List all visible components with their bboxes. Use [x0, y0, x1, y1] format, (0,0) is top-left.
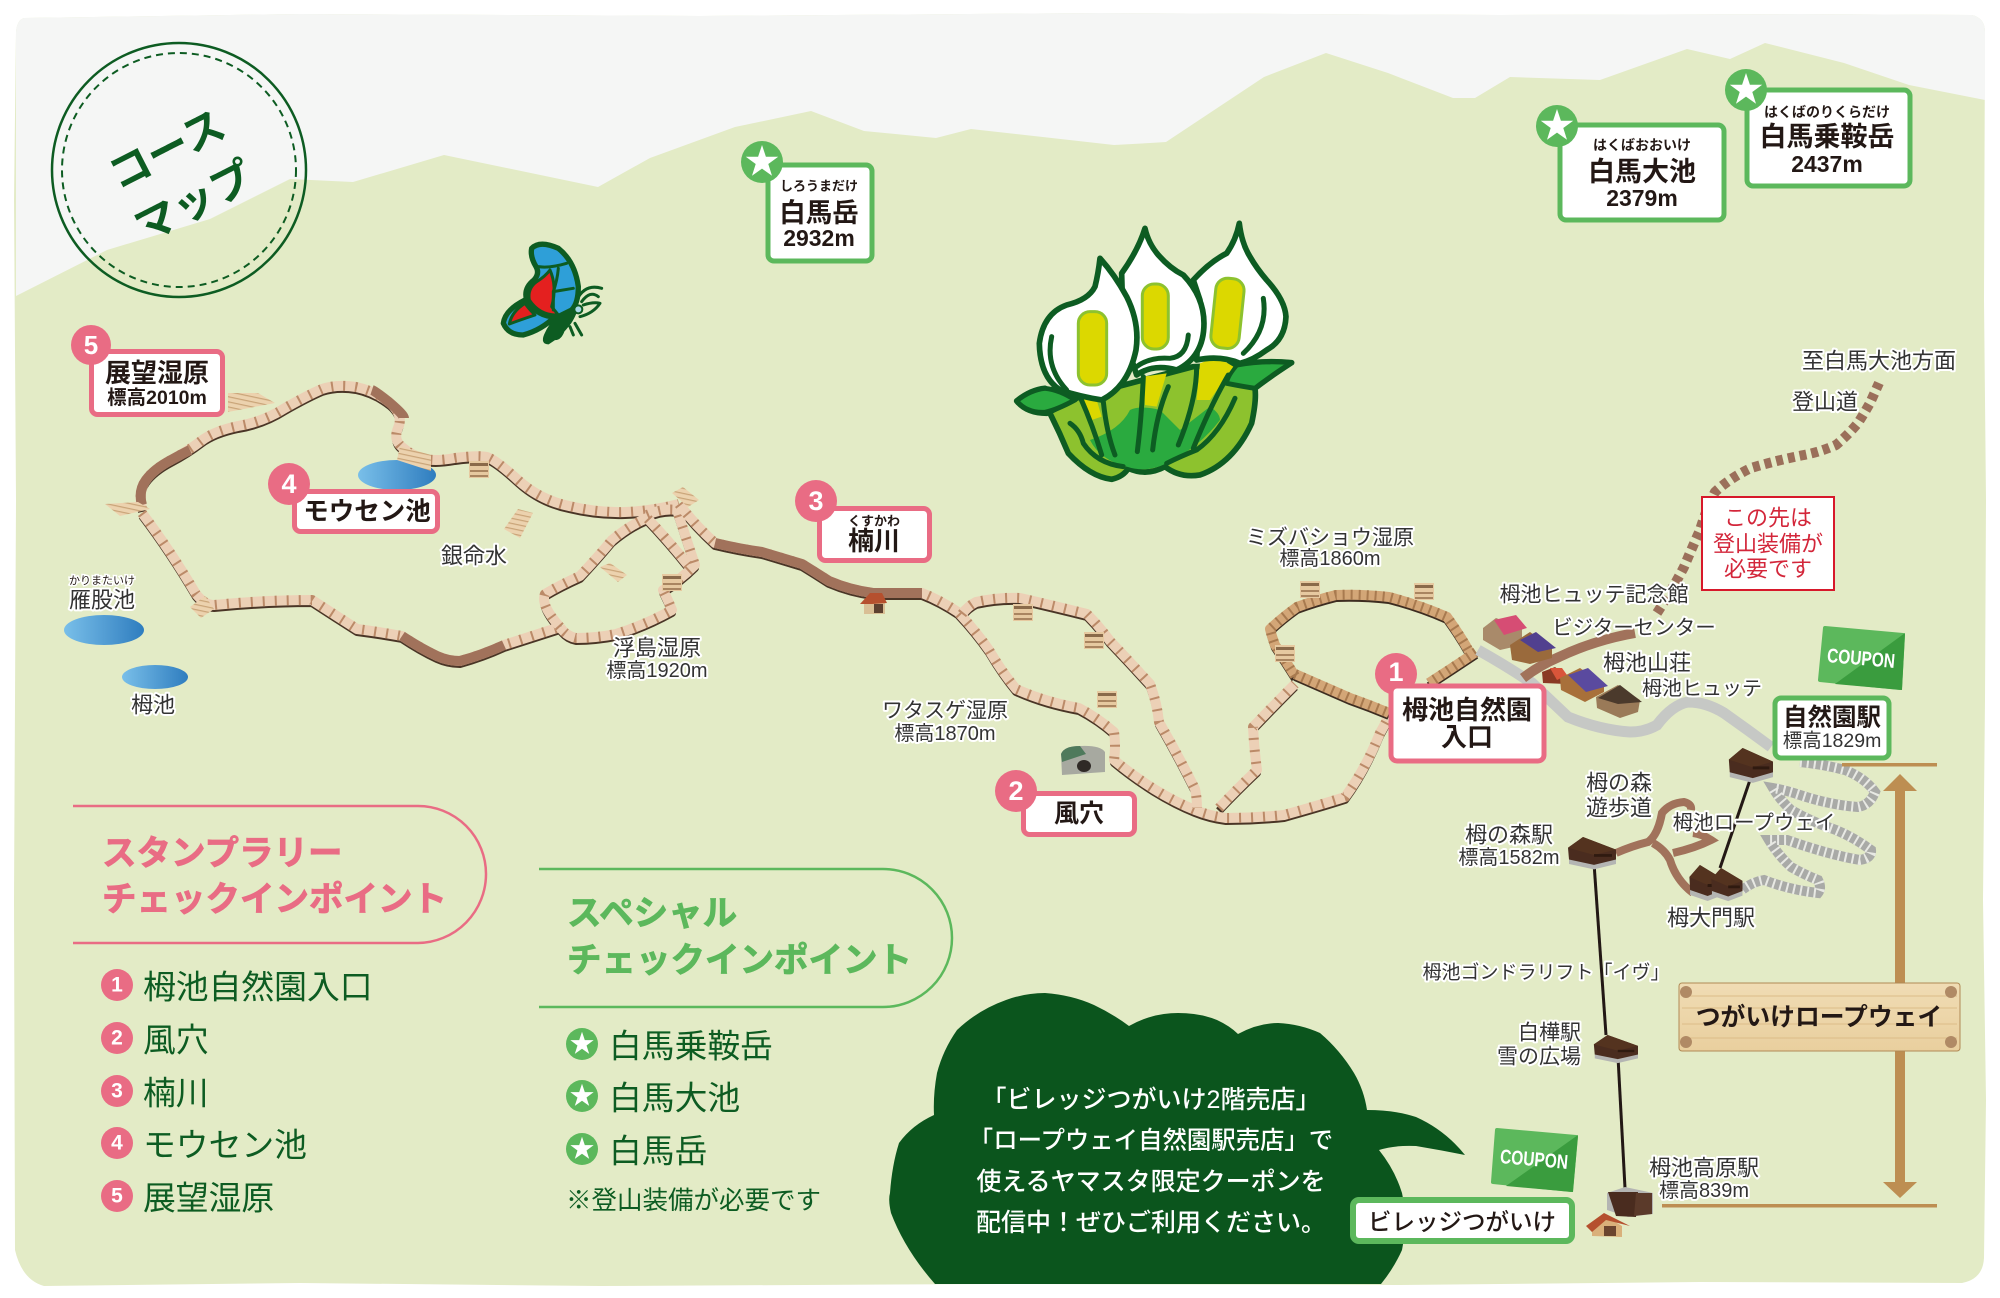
speech bubble: coupon info: 「ロープウェイ自然園駅売店」で [969, 1128, 1333, 1154]
walkway trails [141, 386, 1476, 821]
panel: stamp rally: スタンプラリー [102, 835, 342, 873]
coupon card: Village Tsugaike: COUPON [1499, 1146, 1569, 1174]
course map stamp: マップ [127, 152, 261, 252]
icon: butterfly [503, 244, 602, 343]
place labels: 栂の森 [1586, 770, 1652, 796]
caution: climbing gear needed [1702, 497, 1834, 590]
panel: special checkpoints [539, 869, 952, 1215]
caution: climbing gear needed: この先は [1724, 506, 1812, 530]
checkpoint 5: observation marsh [71, 325, 222, 414]
cable lines [1594, 777, 1751, 1188]
icon: cabin at Kusukawa [860, 593, 887, 614]
place labels: 浮島湿原 [613, 636, 701, 660]
speech bubble: coupon info: 配信中！ぜひご利用ください。 [976, 1209, 1326, 1237]
place labels: ミズバショウ湿原 [1246, 526, 1414, 550]
special list item 2: 白馬大池 [609, 1080, 740, 1116]
speech bubble: coupon info: 「ビレッジつがいけ2階売店」 [982, 1086, 1320, 1114]
special point: Hakuba Norikuradake: 2437m [1791, 151, 1863, 177]
special point: Hakuba Oike: 白馬大池 [1588, 157, 1696, 187]
checkpoint 5: observation marsh: 5 [84, 330, 98, 360]
place labels: 栂の森駅 [1465, 822, 1553, 848]
stamp list item 3 [101, 1074, 209, 1112]
sign: Tsugaike ropeway: つがいけロープウェイ [1696, 1002, 1942, 1032]
ropeway stone path [1742, 762, 1875, 893]
place labels: 雪の広場 [1497, 1046, 1581, 1068]
station label: Village Tsugaike: ビレッジつがいけ [1368, 1209, 1556, 1235]
checkpoint 2: wind cave: 風穴 [1054, 800, 1104, 828]
place labels: 標高1870m [894, 722, 996, 745]
special point: Hakuba Norikuradake: はくばのりくらだけ [1764, 104, 1890, 120]
place labels: 白樺駅 [1518, 1022, 1581, 1044]
stamp list item 2 [101, 1022, 209, 1058]
checkpoint 2: wind cave: 2 [1008, 776, 1024, 806]
stamp list item 5: 5 [111, 1184, 123, 1208]
place labels: 栂池高原駅 [1649, 1156, 1759, 1180]
label: climbing trail: 登山道 [1792, 390, 1858, 414]
course map stamp: コース [101, 101, 233, 199]
station label: Village Tsugaike [1353, 1200, 1572, 1241]
place labels: 標高839m [1659, 1179, 1749, 1202]
icon: Village Tsugaike house [1586, 1213, 1630, 1237]
course map stamp [52, 43, 306, 297]
icon: ropeway top station [1729, 748, 1773, 783]
place labels: 栂池山荘 [1603, 650, 1691, 676]
place labels: 遊歩道 [1586, 796, 1652, 820]
panel: special checkpoints: スペシャル [567, 895, 737, 933]
stamp list item 3: 楠川 [143, 1074, 209, 1112]
special list item 3: 白馬岳 [609, 1132, 707, 1170]
snowy sky above the mountains [16, 13, 1985, 296]
icon: skunk cabbage flowers [1017, 223, 1292, 479]
special point: Hakuba Oike [1536, 105, 1724, 220]
stamp list item 2: 2 [111, 1026, 123, 1050]
place labels: 栂池ロープウェイ [1673, 812, 1835, 834]
stamp list item 4: 4 [111, 1132, 123, 1154]
special point: Hakuba Oike: はくばおおいけ [1593, 137, 1691, 153]
panel: stamp rally [73, 806, 486, 1216]
place labels: 標高1860m [1279, 547, 1381, 570]
place labels: 栂大門駅 [1667, 906, 1755, 930]
checkpoint 1: nature park entrance: 1 [1388, 657, 1404, 687]
special list item 3 [566, 1132, 707, 1170]
station label: Shizen-en: 標高1829m [1783, 730, 1881, 752]
place labels: ワタスゲ湿原 [882, 700, 1008, 722]
icon: Tsuganomori station [1568, 837, 1616, 869]
checkpoint 3: Kusukawa: 3 [808, 486, 824, 516]
caution: climbing gear needed: 必要です [1724, 556, 1812, 582]
forest walkway [1616, 802, 1711, 893]
grey road [1478, 650, 1771, 747]
special point: Mt. Shirouma: 2932m [783, 225, 855, 251]
place labels: 標高1920m [606, 659, 708, 682]
panel: special checkpoints: チェックインポイント [567, 942, 912, 980]
place labels: 栂池ヒュッテ [1642, 677, 1762, 700]
caution: climbing gear needed: 登山装備が [1713, 532, 1823, 556]
icon: Tsugadaimon station [1689, 865, 1742, 901]
special point: Hakuba Norikuradake [1725, 69, 1910, 186]
stamp list item 1: 栂池自然園入口 [143, 968, 373, 1006]
checkpoint 4: Mousen pond: モウセン池 [303, 498, 431, 526]
checkpoint 3: Kusukawa [795, 480, 930, 560]
speech bubble: coupon info: 使えるヤマスタ限定クーポンを [976, 1168, 1326, 1196]
place labels: 雁股池 [69, 588, 135, 612]
place labels: 栂池ゴンドラリフト「イヴ」 [1422, 962, 1670, 984]
special point: Mt. Shirouma: 白馬岳 [779, 198, 859, 228]
checkpoint 5: observation marsh: 展望湿原 [105, 358, 209, 388]
stamp list item 1: 1 [111, 974, 123, 996]
stamp list item 2: 風穴 [143, 1022, 209, 1058]
checkpoint 4: Mousen pond [268, 463, 438, 532]
special list item 1: 白馬乗鞍岳 [609, 1028, 773, 1064]
icon: Shirakaba station [1594, 1035, 1638, 1063]
stamp list item 3: 3 [111, 1080, 123, 1102]
checkpoint 1: nature park entrance: 栂池自然園 [1402, 695, 1532, 725]
icon: Kogen station [1607, 1187, 1653, 1217]
place labels: かりまたいけ [69, 574, 135, 587]
coupon card: Village Tsugaike [1493, 1130, 1578, 1192]
special point: Hakuba Oike: 2379m [1606, 185, 1678, 211]
checkpoint 3: Kusukawa: くすかわ [848, 514, 900, 528]
panel: stamp rally: チェックインポイント [102, 881, 447, 919]
checkpoint 3: Kusukawa: 楠川 [848, 526, 900, 556]
coupon card: Shizen-en: COUPON [1826, 645, 1896, 673]
place labels: 栂池 [131, 692, 175, 718]
sign: Tsugaike ropeway [1679, 983, 1960, 1051]
stamp list item 5: 展望湿原 [143, 1180, 274, 1216]
place labels: ビジターセンター [1552, 616, 1716, 640]
speech bubble: coupon info [889, 993, 1465, 1284]
brown path to visitor center [1523, 633, 1635, 678]
ropeway elevation arrow [1662, 763, 1937, 1208]
checkpoint 1: nature park entrance: 入口 [1441, 722, 1493, 752]
place labels [69, 526, 1835, 1202]
note: climbing gear: ※登山装備が必要です [566, 1187, 821, 1215]
special point: Mt. Shirouma: しろうまだけ [780, 178, 858, 194]
ponds [64, 460, 436, 689]
checkpoint 1: nature park entrance [1375, 653, 1544, 761]
special point: Mt. Shirouma [741, 141, 872, 261]
stamp list item 4: モウセン池 [143, 1126, 307, 1164]
mountain trail [1657, 383, 1879, 613]
icon: wind cave [1061, 746, 1105, 775]
place labels: 標高1582m [1458, 846, 1560, 869]
checkpoint 4: Mousen pond: 4 [281, 469, 297, 499]
special point: Hakuba Norikuradake: 白馬乗鞍岳 [1760, 122, 1894, 152]
station label: Shizen-en [1775, 698, 1889, 758]
coupon card: Shizen-en [1820, 628, 1905, 690]
place labels: 栂池ヒュッテ記念館 [1500, 584, 1688, 606]
icon: village houses [1483, 615, 1642, 718]
label: mountain trail destination: 至白馬大池方面 [1802, 348, 1956, 374]
checkpoint 2: wind cave [995, 770, 1134, 834]
checkpoint 5: observation marsh: 標高2010m [107, 386, 207, 409]
place labels: 銀命水 [441, 544, 507, 568]
station label: Shizen-en: 自然園駅 [1783, 704, 1881, 732]
decks and benches [105, 393, 1434, 708]
